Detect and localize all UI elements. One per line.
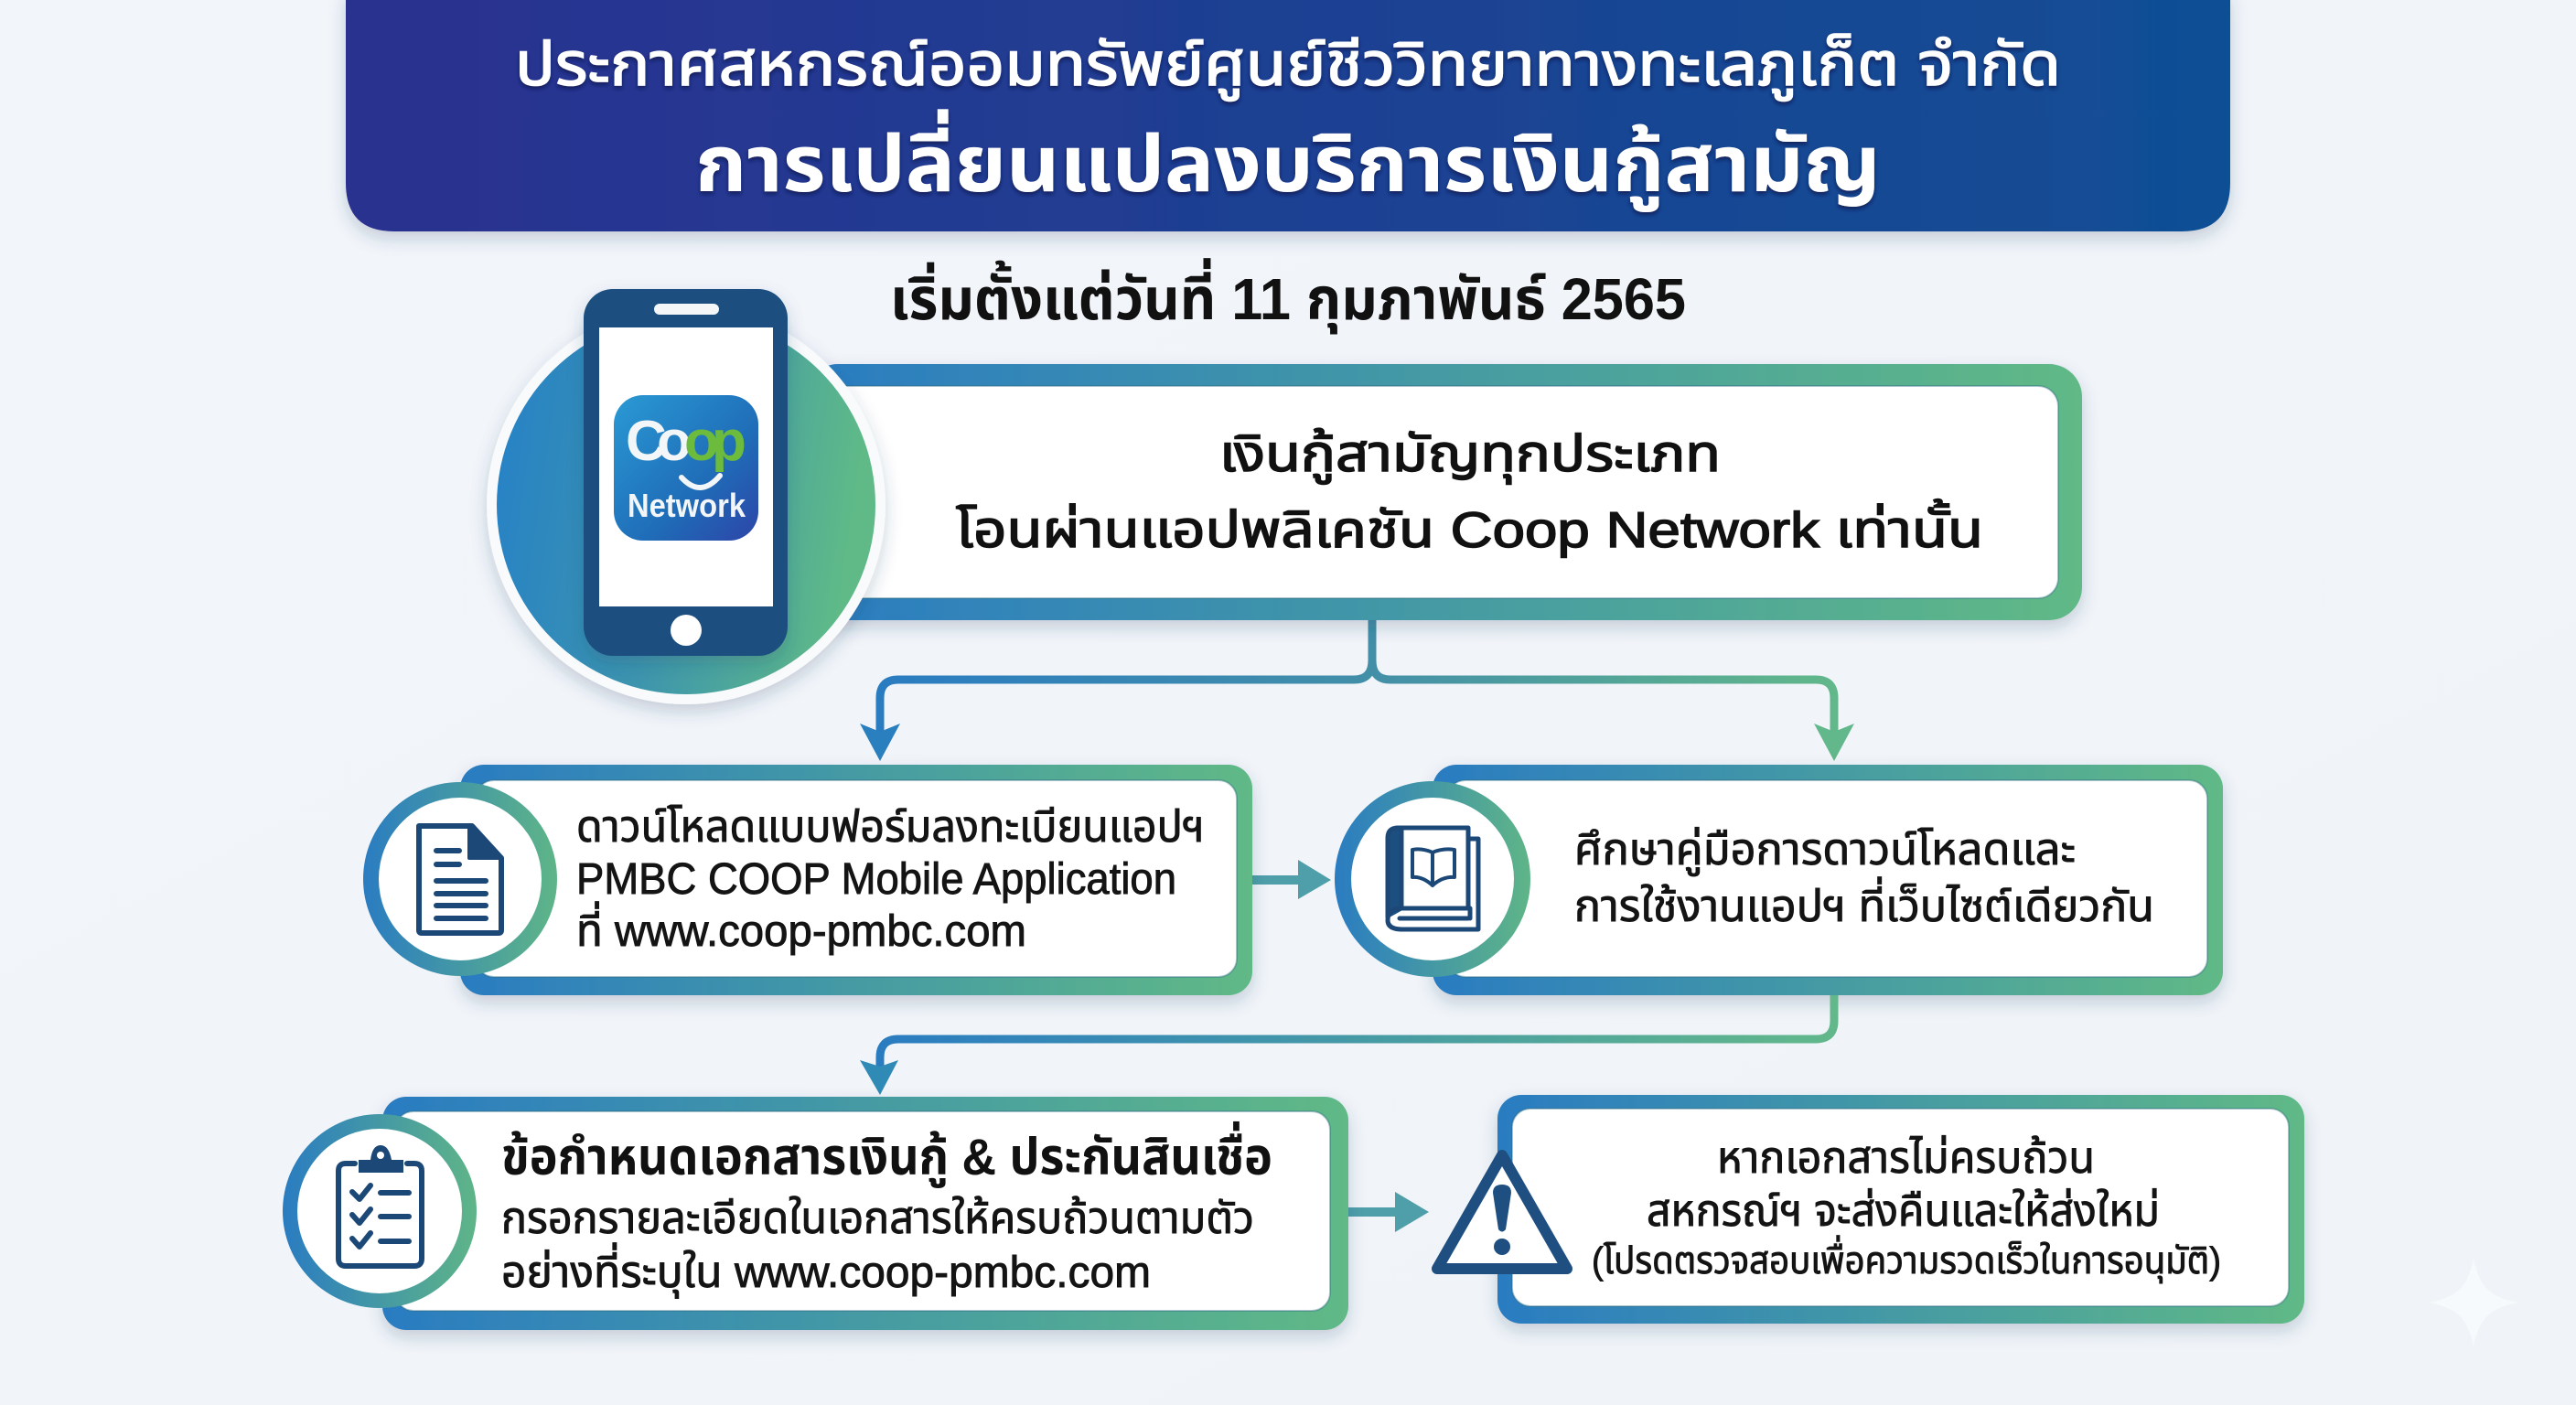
decorative sparkle bbox=[2430, 1259, 2517, 1346]
step 1 text: PMBC COOP Mobile Application bbox=[576, 855, 1176, 904]
step 1 text: ดาวน์โหลดแบบฟอร์มลงทะเบียนแอปฯ bbox=[576, 803, 1205, 852]
step 1 text bbox=[576, 803, 1205, 956]
step 3 text bbox=[501, 1195, 1254, 1299]
icon: book bbox=[1335, 781, 1530, 977]
title line: organisation: ประกาศสหกรณ์ออมทรัพย์ศูนย์ชีววิทยาทางทะเลภูเก็ต จำกัด bbox=[515, 30, 2061, 102]
header banner bbox=[346, 0, 2230, 231]
step 3 text: อย่างที่ระบุใน www.coop-pmbc.com bbox=[501, 1242, 1151, 1299]
panel: step 3 document requirements bbox=[283, 1097, 1348, 1330]
step 2 text: ศึกษาคู่มือการดาวน์โหลดและ bbox=[1574, 826, 2076, 876]
warning text: สหกรณ์ฯ จะส่งคืนและให้ส่งใหม่ bbox=[1647, 1187, 2160, 1236]
step 1 text: ที่ www.coop-pmbc.com bbox=[576, 901, 1026, 956]
icon: warning triangle bbox=[1437, 1155, 1567, 1269]
main notice text: โอนผ่านแอปพลิเคชัน Coop Network เท่านั้น bbox=[956, 499, 1983, 558]
connector: main box to two steps bbox=[860, 620, 1854, 761]
title line: subject: การเปลี่ยนแปลงบริการเงินกู้สามัญ bbox=[695, 109, 1881, 212]
step 2 text: การใช้งานแอปฯ ที่เว็บไซต์เดียวกัน bbox=[1574, 876, 2154, 931]
icon: document bbox=[363, 782, 557, 976]
app icon bbox=[614, 395, 758, 541]
warning text bbox=[1592, 1134, 2221, 1283]
arrow: step 1 to step 2 bbox=[1252, 860, 1331, 899]
panel: step 1 download form bbox=[363, 765, 1252, 995]
connector: step 2 to step 3 bbox=[860, 995, 1834, 1095]
step 3 heading: ข้อกำหนดเอกสารเงินกู้ & ประกันสินเชื่อ bbox=[501, 1121, 1272, 1188]
warning text: หากเอกสารไม่ครบถ้วน bbox=[1717, 1134, 2095, 1183]
icon: checklist clipboard bbox=[283, 1114, 477, 1308]
panel: warning incomplete documents bbox=[1437, 1095, 2304, 1324]
arrow: step 3 to warning bbox=[1348, 1192, 1429, 1232]
step 3 text: กรอกรายละเอียดในเอกสารให้ครบถ้วนตามตัว bbox=[501, 1195, 1254, 1243]
icon: phone with Coop Network app bbox=[487, 289, 886, 704]
effective date: เริ่มตั้งแต่วันที่ 11 กุมภาพันธ์ 2565 bbox=[890, 258, 1686, 335]
step 2 text bbox=[1574, 826, 2154, 931]
warning text: (โปรดตรวจสอบเพื่อความรวดเร็วในการอนุมัติ) bbox=[1592, 1235, 2221, 1283]
app icon: Network bbox=[628, 487, 746, 524]
panel: step 2 study manual bbox=[1335, 765, 2223, 995]
panel: main notice bbox=[805, 364, 2082, 620]
main notice heading: เงินกู้สามัญทุกประเภท bbox=[1219, 425, 1721, 485]
app icon: Coop bbox=[626, 410, 746, 473]
